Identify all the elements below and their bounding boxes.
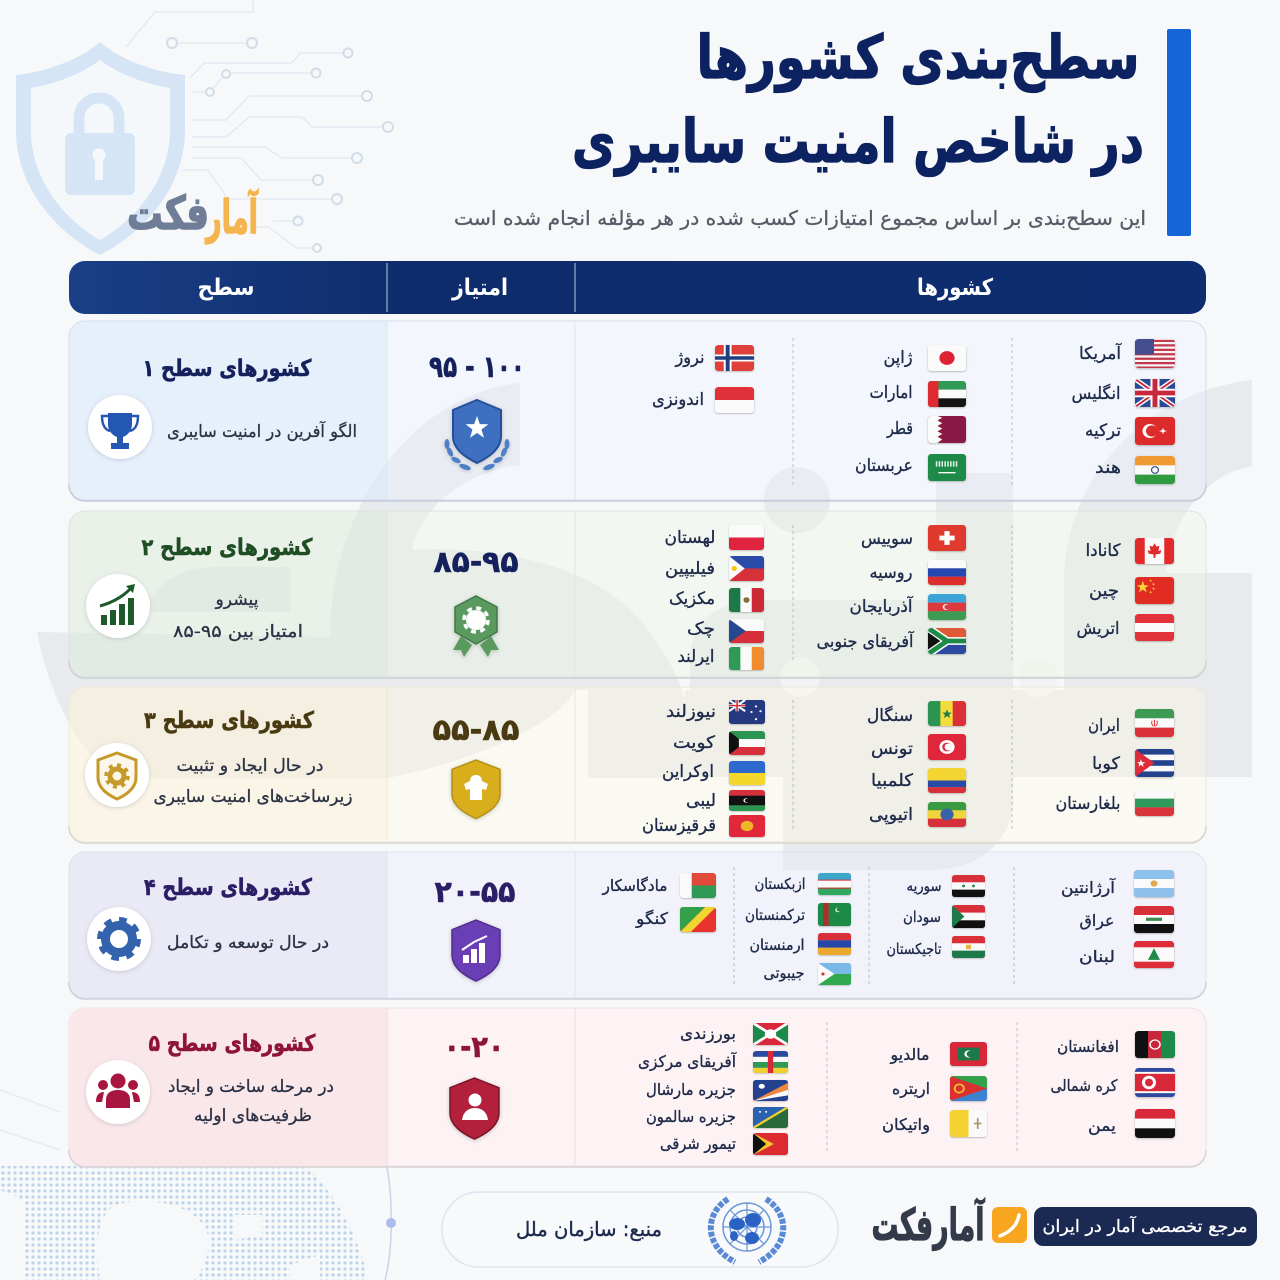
label: Tunisia: تونس — [871, 739, 913, 759]
icon: UN emblem — [711, 1199, 783, 1262]
flag: Azerbaijan — [927, 594, 967, 622]
label: Congo: کنگو — [635, 909, 668, 929]
label: Iran: ایران — [1088, 716, 1120, 736]
flag: Colombia — [927, 768, 967, 794]
flag: Ireland — [728, 647, 765, 672]
label: New Zealand: نیوزلند — [666, 702, 716, 722]
heading: level 4: کشورهای سطح ۴ — [144, 875, 313, 901]
description: ظرفیت‌های اولیه — [194, 1106, 312, 1126]
flag: Bulgaria — [1134, 791, 1175, 818]
flag: Burundi — [752, 1023, 789, 1046]
title accent bar — [1167, 29, 1191, 236]
label: Burundi: بورزندی — [680, 1024, 736, 1044]
score range: ۰-۲۰ — [444, 1030, 504, 1065]
label: UK: انگلیس — [1072, 383, 1120, 404]
heading: level 2: کشورهای سطح ۲ — [141, 535, 313, 561]
label: China: چین — [1089, 581, 1119, 601]
flag: Afghanistan — [1134, 1031, 1176, 1060]
label: Djibouti: جیبوتی — [764, 964, 804, 982]
flag: USA — [1134, 338, 1176, 370]
background watermark logo — [37, 380, 1252, 870]
label: Qatar: قطر — [886, 419, 913, 439]
flag: South Africa — [927, 628, 967, 656]
small watermark logo: آمار — [205, 189, 259, 244]
label: Philippines: فیلیپین — [665, 559, 715, 579]
flag: Syria — [951, 875, 986, 898]
flag: Marshall Islands — [752, 1080, 789, 1102]
flag: Cuba — [1134, 748, 1175, 779]
flag: Senegal — [927, 701, 967, 728]
title — [572, 23, 1144, 177]
label: Senegal: سنگال — [867, 705, 913, 726]
score range: ۵۵-۸۵ — [432, 713, 520, 748]
icon: trophy — [88, 395, 152, 459]
label: Armenia: ارمنستان — [750, 936, 804, 954]
label: Czech Republic: چک — [687, 619, 715, 639]
label: Uzbekistan: ازبکستان — [754, 875, 806, 893]
label: Afghanistan: افغانستان — [1057, 1037, 1119, 1056]
description: در حال توسعه و تکامل — [167, 933, 329, 953]
flag: Indonesia — [714, 387, 755, 414]
flag: Switzerland — [927, 525, 967, 552]
label: Azerbaijan: آذربایجان — [850, 595, 914, 617]
label: USA: آمریکا — [1079, 342, 1122, 364]
label: Japan: ژاپن — [884, 348, 912, 368]
label: East Timor: تیمور شرقی — [660, 1134, 736, 1154]
icon: shield with gear — [85, 743, 149, 807]
description — [173, 590, 303, 642]
label: Maldives: مالدیو — [890, 1045, 930, 1065]
score range: ۲۰-۵۵ — [434, 875, 516, 910]
icon: people — [86, 1060, 150, 1124]
logo: Amarfact: آمارفکت — [872, 1197, 985, 1251]
icon: blue shield badge — [444, 400, 510, 471]
table header: امتیاز — [451, 275, 508, 301]
flag: New Zealand — [728, 700, 766, 726]
description — [168, 1077, 334, 1126]
flag: UK — [1134, 378, 1176, 409]
description: الگو آفرین در امنیت سایبری — [167, 420, 357, 442]
flag: Argentina — [1133, 870, 1175, 898]
panel: level 4 — [69, 852, 1206, 999]
label: Cuba: کوبا — [1092, 754, 1121, 774]
label: Poland: لهستان — [664, 528, 716, 548]
flag: Ukraine — [728, 761, 766, 786]
flag: Japan — [927, 346, 967, 372]
panel: level 2 — [69, 511, 1206, 678]
flag: Philippines — [728, 556, 765, 582]
label: Mexico: مکزیک — [669, 589, 715, 609]
label: Syria: سوریه — [906, 877, 942, 895]
label: Indonesia: اندونزی — [652, 390, 704, 410]
label: Solomon Islands: جزیره سالمون — [646, 1107, 736, 1127]
background globe — [0, 1090, 396, 1280]
flag: Canada — [1134, 538, 1175, 566]
label: Kyrgyzstan: قرقیزستان — [642, 816, 716, 836]
small watermark logo: فکت — [127, 186, 209, 240]
flag: Kyrgyzstan — [728, 815, 766, 838]
tagline badge — [1034, 1207, 1257, 1246]
flag: Congo — [679, 907, 717, 934]
icon: red shield badge — [450, 1078, 499, 1139]
label: Marshall Islands: جزیره مارشال — [646, 1080, 736, 1100]
label: Eritrea: اریتره — [892, 1079, 930, 1099]
label: Tajikistan: تاجیکستان — [886, 940, 942, 958]
description: امتیاز بین ۹۵-۸۵ — [173, 622, 303, 642]
label: Ireland: ایرلند — [678, 647, 714, 667]
icon: orange logo mark — [992, 1207, 1027, 1243]
flag: Libya — [728, 790, 766, 812]
flag: Saudi Arabia — [927, 454, 967, 482]
heading: level 5: کشورهای سطح ۵ — [148, 1031, 316, 1057]
flag: Norway — [714, 345, 755, 372]
flag: Maldives — [949, 1042, 988, 1068]
label: Libya: لیبی — [686, 791, 716, 811]
label: Bulgaria: بلغارستان — [1056, 794, 1120, 814]
source text: منبع: سازمان ملل — [516, 1217, 662, 1241]
label: UAE: امارات — [870, 383, 912, 403]
label: Yemen: یمن — [1088, 1116, 1116, 1136]
icon: gear — [87, 907, 151, 971]
label: Kuwait: کویت — [673, 733, 716, 753]
label: Turkey: ترکیه — [1085, 421, 1121, 441]
score range: ۸۵-۹۵ — [434, 545, 518, 580]
label: Sudan: سودان — [903, 908, 941, 926]
flag: Uzbekistan — [817, 873, 852, 896]
label: Ethiopia: اتیوپی — [869, 805, 913, 825]
panel: level 3 — [69, 687, 1206, 843]
flag: Kuwait — [728, 731, 766, 756]
panel: level 5 — [69, 1008, 1206, 1167]
label: North Korea: کره شمالی — [1050, 1076, 1118, 1096]
label: Canada: کانادا — [1086, 541, 1121, 561]
flag: Mexico — [728, 588, 765, 614]
flag: Vatican — [949, 1110, 988, 1138]
label: Turkmenistan: ترکمنستان — [745, 906, 805, 924]
icon: background shield with lock — [16, 42, 185, 255]
heading: level 3: کشورهای سطح ۳ — [144, 708, 315, 734]
flag: Russia — [927, 560, 967, 586]
score range: ۹۵ - ۱۰۰ — [429, 350, 525, 385]
flag: India — [1134, 456, 1176, 486]
label: Iraq: عراق — [1080, 911, 1114, 931]
flag: Madagascar — [679, 873, 717, 900]
table header: کشورها — [917, 275, 994, 301]
flag: Djibouti — [817, 963, 852, 986]
label: Saudi Arabia: عربستان — [855, 456, 913, 476]
flag: Solomon Islands — [752, 1107, 789, 1130]
table header — [69, 261, 1206, 314]
label: Argentina: آرژانتین — [1061, 878, 1117, 898]
flag: Yemen — [1134, 1108, 1176, 1140]
label: Vatican: واتیکان — [882, 1115, 930, 1135]
label: Colombia: کلمبیا — [871, 771, 914, 791]
panel: level 1 — [69, 321, 1206, 501]
flag: Ethiopia — [927, 802, 967, 828]
label: Central African Republic: آفریقای مرکزی — [638, 1052, 737, 1072]
source pill — [442, 1192, 838, 1267]
flag: Tajikistan — [951, 936, 986, 960]
label: Russia: روسیه — [870, 563, 912, 583]
flag: Armenia — [817, 933, 852, 956]
tagline badge: مرجع تخصصی آمار در ایران — [1042, 1215, 1248, 1237]
flag: Sudan — [951, 905, 986, 930]
icon: gold shield badge — [452, 760, 500, 819]
subtitle: این سطح‌بندی بر اساس مجموع امتیازات کسب شده در هر مؤلفه انجام شده است — [454, 206, 1146, 230]
heading: level 1: کشورهای سطح ۱ — [142, 356, 312, 382]
flag: Lebanon — [1133, 941, 1175, 970]
flag: Eritrea — [949, 1076, 988, 1102]
flag: Iraq — [1133, 906, 1175, 934]
label: Madagascar: مادگاسکار — [602, 876, 668, 896]
label: South Africa: آفریقای جنوبی — [816, 630, 915, 652]
flag: Austria — [1134, 614, 1175, 642]
flag: Central African Republic — [752, 1051, 789, 1074]
label: Lebanon: لبنان — [1079, 947, 1115, 966]
table header: سطح — [198, 275, 254, 301]
flag: North Korea — [1134, 1068, 1176, 1099]
flag: UAE — [927, 381, 967, 408]
title: در شاخص امنیت سایبری — [572, 107, 1144, 177]
icon: green rosette badge — [453, 596, 499, 657]
label: Switzerland: سوییس — [861, 529, 913, 549]
flag: East Timor — [752, 1133, 789, 1156]
icon: growth chart — [86, 574, 150, 638]
flag: Turkmenistan — [817, 903, 852, 928]
label: Ukraine: اوکراین — [662, 762, 714, 782]
description: در حال ایجاد و تثبیت — [176, 756, 324, 776]
flag: Tunisia — [927, 734, 967, 762]
label: India: هند — [1095, 458, 1121, 478]
description: زیرساخت‌های امنیت سایبری — [154, 787, 352, 807]
flag: China — [1134, 577, 1175, 606]
flag: Poland — [728, 525, 765, 552]
description — [154, 756, 352, 807]
flag: Czech Republic — [728, 619, 765, 644]
description: در مرحله ساخت و ایجاد — [168, 1077, 334, 1097]
background circuit lines — [126, 0, 393, 252]
label: Norway: نروژ — [675, 348, 704, 368]
icon: purple shield badge — [452, 920, 500, 981]
flag: Iran — [1134, 708, 1175, 739]
title: سطح‌بندی کشورها — [696, 23, 1140, 93]
flag: Turkey — [1134, 416, 1176, 447]
label: Austria: اتریش — [1076, 619, 1120, 639]
flag: Qatar — [927, 416, 967, 444]
description: پیشرو — [214, 590, 259, 610]
